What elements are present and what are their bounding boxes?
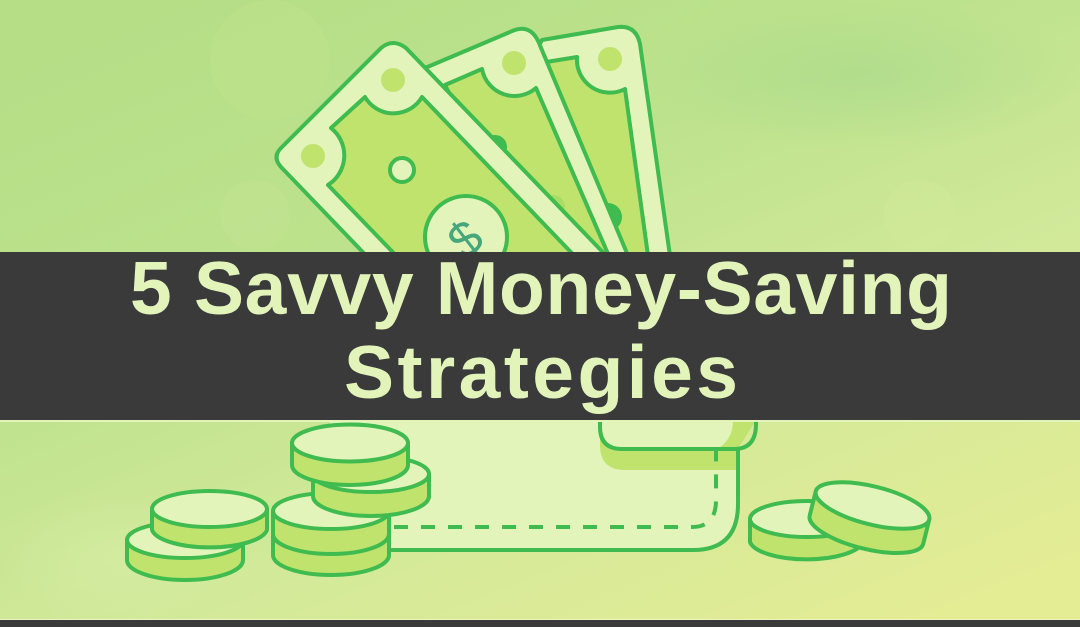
wallet stitching — [394, 450, 716, 527]
title — [130, 246, 952, 414]
band highlight line — [0, 420, 1080, 422]
wallet body — [330, 418, 738, 550]
banknote corner dots — [301, 68, 405, 168]
banknote: middle — [425, 29, 634, 270]
wallet flap — [600, 420, 733, 449]
banknote medallion with dollar sign — [425, 196, 507, 278]
bottom dark strip — [0, 620, 1080, 627]
wallet flap outline — [600, 420, 756, 449]
illustration: wallet — [330, 418, 756, 550]
banknote: back — [525, 27, 672, 270]
illustration: fan of banknotes — [276, 27, 672, 278]
title line 2: Strategies — [344, 330, 738, 414]
coin stack: left pair — [127, 491, 267, 580]
title line 1: 5 Savvy Money-Saving — [130, 246, 952, 330]
coin stack: centre — [273, 424, 429, 575]
coin pair: right — [750, 473, 934, 562]
banknote medallion with dollar sign: $ — [437, 209, 494, 270]
banknote small ring — [390, 158, 414, 182]
wallet outline — [392, 449, 738, 550]
title band — [0, 252, 1080, 420]
wallet flap shadow — [600, 420, 756, 470]
bottom highlight line — [0, 619, 1080, 620]
banknote: front — [276, 43, 620, 278]
